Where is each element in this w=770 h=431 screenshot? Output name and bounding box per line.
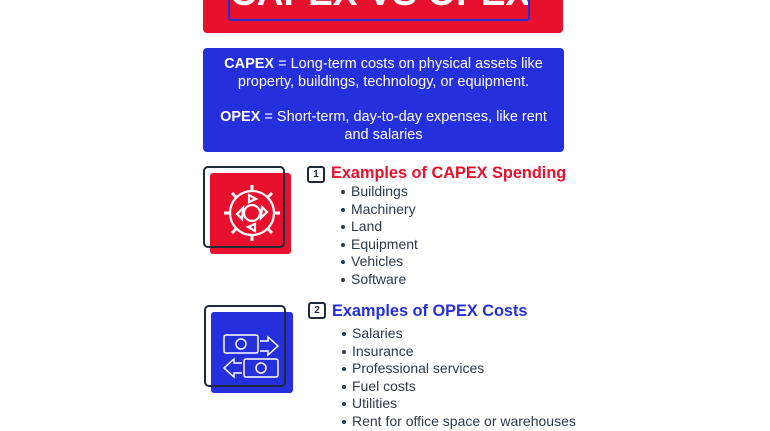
definitions panel: CAPEX = Long-term costs on physical assets like property, buildings, technology, or equipment. bbox=[224, 56, 543, 90]
list: capex: Vehicles bbox=[351, 253, 403, 269]
list: capex: Machinery bbox=[351, 201, 416, 217]
definitions panel: OPEX = Short-term, day-to-day expenses, like rent and salaries bbox=[220, 109, 547, 143]
list: opex bbox=[342, 325, 576, 429]
heading: opex examples: Examples of OPEX Costs bbox=[332, 302, 527, 320]
icon: money exchange bbox=[204, 305, 293, 393]
heading: capex examples: Examples of CAPEX Spending bbox=[331, 164, 566, 182]
heading: capex examples: 1 bbox=[313, 169, 319, 180]
list: capex: Equipment bbox=[351, 236, 418, 252]
list: opex: Professional services bbox=[352, 360, 484, 376]
list: capex: Land bbox=[351, 218, 382, 234]
list: capex: Buildings bbox=[351, 183, 408, 199]
list: opex: Utilities bbox=[352, 395, 397, 411]
list: capex bbox=[341, 183, 418, 287]
icon: gear bbox=[203, 166, 291, 254]
list: capex: Software bbox=[351, 271, 406, 287]
title banner bbox=[203, 0, 563, 33]
list: opex: Rent for office space or warehouses bbox=[352, 413, 576, 429]
list: opex: Salaries bbox=[352, 325, 403, 341]
list: opex: Fuel costs bbox=[352, 378, 416, 394]
title bbox=[228, 0, 530, 21]
list: opex: Insurance bbox=[352, 343, 413, 359]
heading: opex examples: 2 bbox=[314, 305, 320, 316]
definitions panel bbox=[203, 48, 564, 152]
